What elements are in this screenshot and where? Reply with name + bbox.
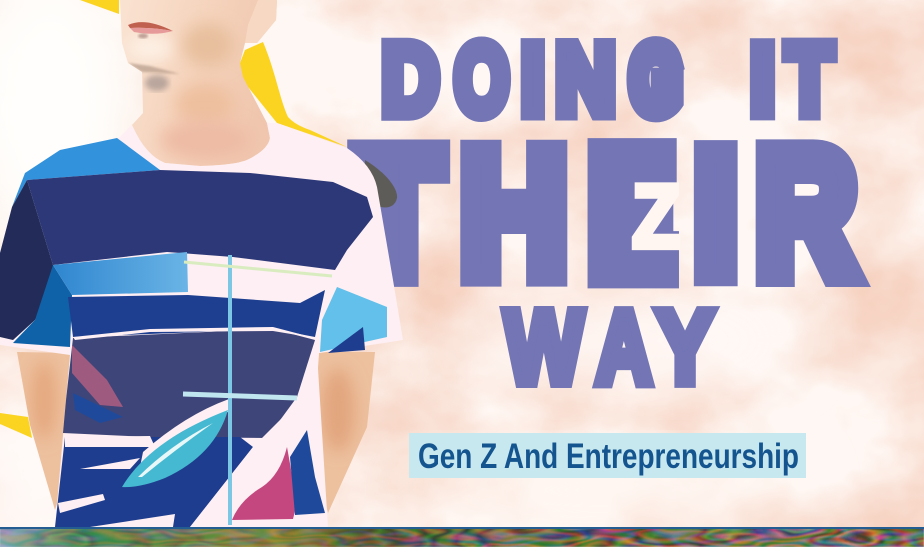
right navy patch [290, 430, 325, 515]
title line 2: THEIR [355, 112, 856, 313]
title line 2: THEIR: E [594, 123, 670, 303]
grey blob beside the shirt [365, 160, 397, 207]
title line 1: DOING IT: O [455, 24, 509, 136]
yellow shapes behind the man [0, 0, 347, 438]
white stripes [58, 327, 315, 527]
right sleeve print [320, 287, 387, 353]
title line 1: DOING IT: I [521, 24, 545, 135]
title line 2: THEIR: T [355, 114, 442, 313]
title [355, 23, 856, 405]
title line 1: DOING IT: T [786, 23, 833, 135]
title line 3: WAY [505, 289, 714, 405]
title line 3: WAY: Y [656, 290, 714, 405]
arms [17, 352, 375, 513]
title line 1: DOING IT: D [382, 25, 439, 136]
subtitle label: Gen Z And Entrepreneurship [418, 437, 799, 476]
title line 2: THEIR: I [694, 112, 738, 313]
title line 3: WAY: A [596, 291, 652, 405]
dark belly panel [63, 329, 315, 438]
title line 1: DOING IT [382, 23, 833, 136]
title line 2: THEIR: H [460, 113, 567, 313]
bottom marbled strip [0, 527, 924, 547]
blue cross lines [183, 255, 332, 525]
shoulder blue [12, 138, 160, 207]
left sleeve [0, 180, 55, 340]
title line 2: THEIR: Z [632, 166, 680, 266]
white diagonal swath [190, 340, 320, 527]
head and neck [120, 0, 277, 166]
man in patterned t-shirt [0, 0, 403, 527]
shirt base [0, 123, 403, 527]
lower navy panel [55, 437, 253, 527]
pink patch [232, 447, 297, 520]
royal navy band [68, 290, 325, 337]
title line 1: DOING IT: I [750, 24, 775, 136]
title line 1: DOING IT: N [556, 25, 616, 135]
maroon shape [73, 393, 123, 423]
title line 2: THEIR: R [756, 113, 856, 313]
light blue band [53, 252, 188, 295]
surf leaf [122, 399, 229, 487]
title line 1: DOING IT: G [631, 28, 681, 132]
navy chest band [27, 170, 373, 270]
title line 3: WAY: W [505, 289, 584, 405]
